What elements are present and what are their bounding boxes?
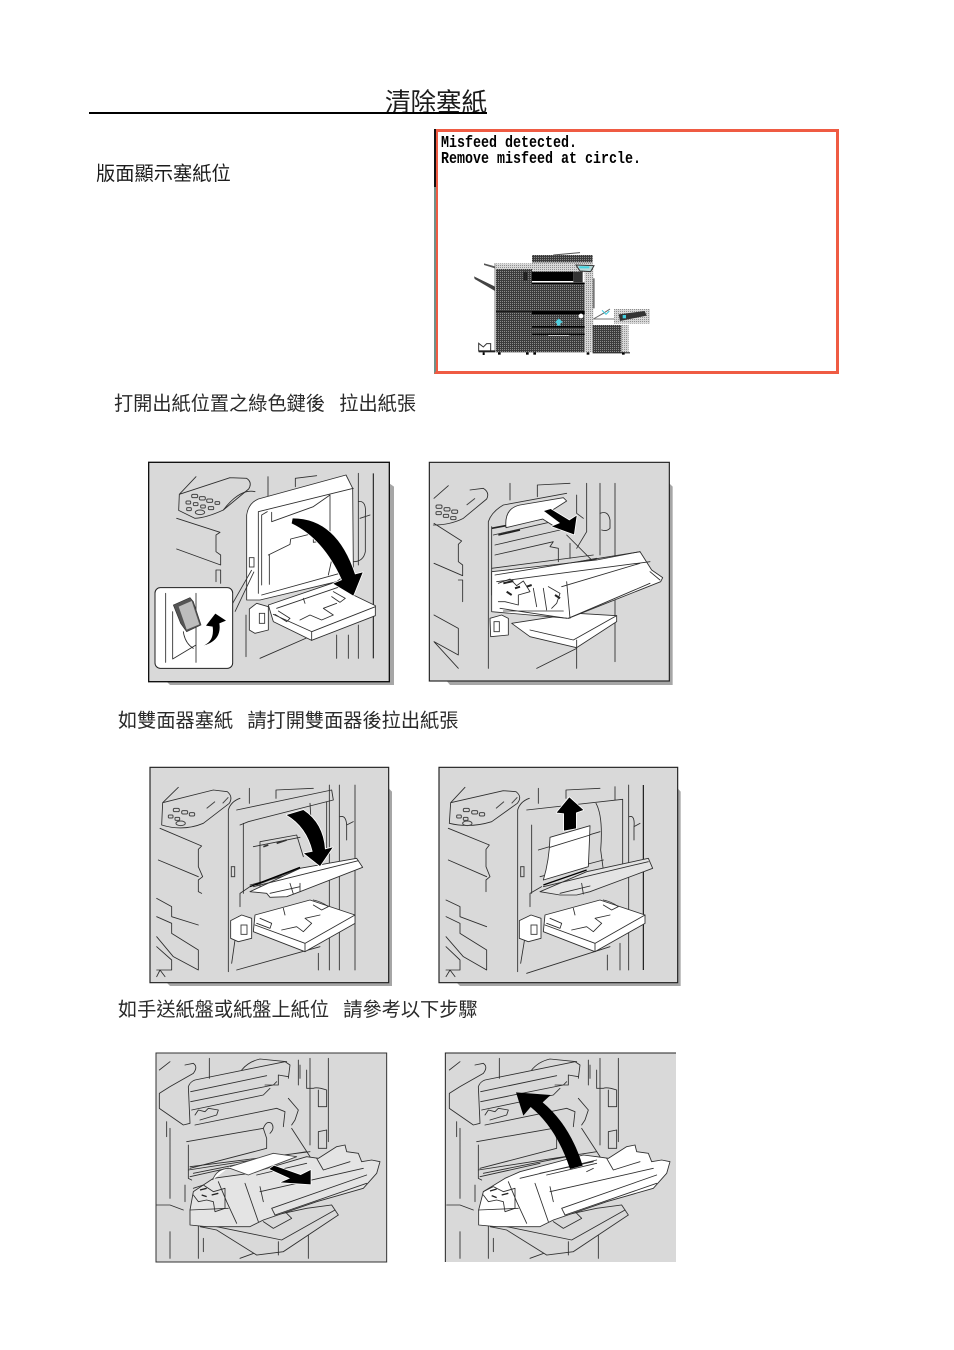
machine background lines (446, 785, 640, 977)
opened unit (190, 1145, 380, 1227)
lower tray (519, 900, 645, 952)
tray (200, 1205, 338, 1255)
illustration: jam at manual tray (156, 1052, 388, 1262)
keypad (457, 797, 524, 877)
shadow (167, 788, 392, 986)
caption: step 2: 如雙面器塞紙 請打開雙面器後拉出紙張 (118, 711, 458, 732)
finisher trays (484, 263, 495, 268)
drawers (532, 283, 585, 284)
finisher body (496, 269, 532, 352)
bypass tray (249, 582, 375, 640)
hinge block (490, 615, 508, 637)
machine background lines (447, 1058, 618, 1258)
arrow: close unit upward (516, 1092, 583, 1169)
caption: step 1: 打開出紙位置之綠色鍵後 拉出紙張 (114, 394, 416, 415)
gears and rollers (498, 579, 560, 610)
tray (490, 1205, 628, 1255)
jammed paper (213, 1153, 297, 1180)
panel: misfeed screen (434, 129, 839, 374)
lever (173, 598, 201, 632)
screen message line 1: Misfeed detected. (441, 135, 577, 153)
illustration: open door with green lever (148, 462, 394, 685)
roller dark marks (492, 517, 597, 562)
title: 清除塞紙 (385, 88, 487, 116)
screen left edge bar (434, 129, 436, 187)
duplex unit opened (250, 858, 363, 897)
callout inset (593, 309, 610, 319)
door rollers (263, 840, 287, 847)
duplex unit opened (540, 858, 653, 895)
keypad (168, 797, 235, 877)
frame (150, 767, 389, 983)
machine background lines (157, 1058, 328, 1258)
shadow (457, 788, 681, 986)
arrow: pull paper (544, 509, 577, 534)
machine background lines (177, 473, 370, 658)
opened unit (479, 1145, 670, 1227)
illustration: open duplex unit (149, 766, 392, 986)
frame (156, 1053, 387, 1262)
machine background lines (433, 483, 615, 668)
arrow: pull paper up (557, 797, 583, 831)
frame (429, 462, 669, 681)
lower tray (231, 900, 355, 952)
jammed paper (506, 498, 570, 530)
door latch (249, 558, 254, 567)
main unit (532, 282, 585, 352)
keypad (186, 494, 220, 515)
open door (247, 475, 353, 600)
illustration: pull out paper (428, 462, 673, 685)
open tray (512, 613, 617, 648)
arrow: pull paper out (269, 1166, 311, 1184)
screen red inner edge (436, 132, 438, 372)
feet (483, 352, 625, 355)
machine background lines (157, 785, 355, 977)
inset: green lever (155, 570, 254, 668)
caption: step 3: 如手送紙盤或紙盤上紙位 請參考以下步驟 (118, 1000, 478, 1021)
title underline (89, 112, 487, 114)
frame (439, 767, 678, 983)
keypad (436, 498, 475, 520)
arrow: duplex opens down (287, 810, 333, 866)
side cabinet (593, 325, 623, 352)
icon: printer on screen (474, 252, 650, 355)
arrow: door opens down (292, 518, 363, 596)
screen message line 2: Remove misfeed at circle. (441, 151, 641, 169)
shadow (167, 483, 394, 685)
illustration: close the unit (444, 1052, 676, 1262)
control panel (576, 265, 594, 272)
jammed paper (543, 826, 590, 880)
shadow (447, 483, 673, 685)
frame (445, 1053, 676, 1262)
open door panel (492, 552, 663, 618)
heading: panel display: 版面顯示塞紙位 (96, 164, 231, 185)
frame (149, 462, 389, 682)
circle mark (555, 318, 563, 326)
illustration: remove paper upwards (438, 766, 681, 986)
arrow: lift lever (203, 614, 226, 646)
